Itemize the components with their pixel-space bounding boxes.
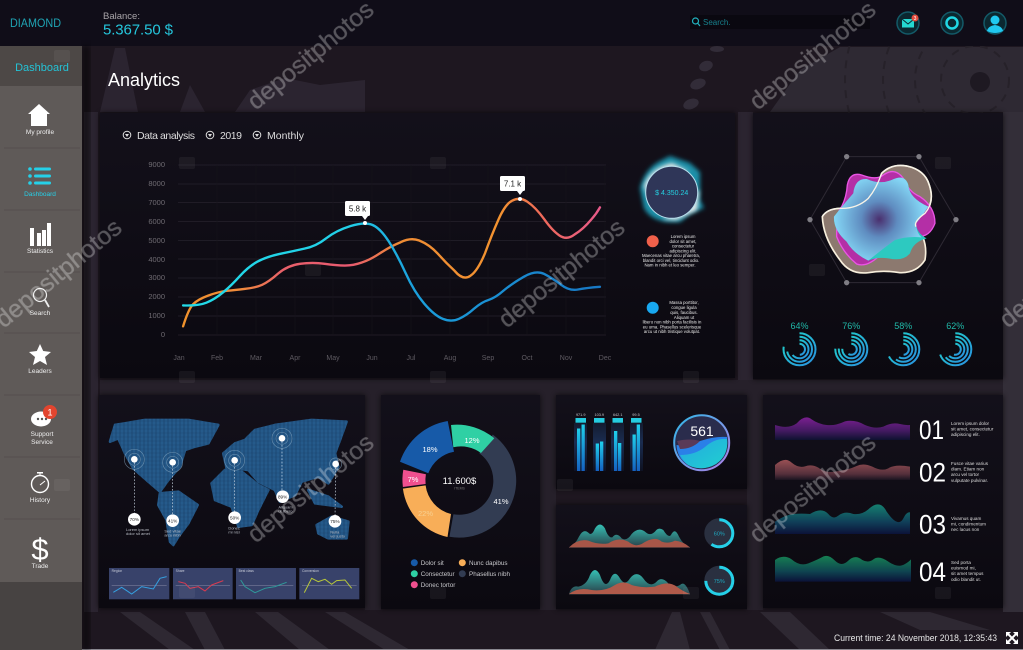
- logo: DIAMOND: [10, 18, 61, 30]
- legend: orange series: [642, 234, 700, 268]
- map pins: [124, 428, 346, 538]
- filter row: [123, 130, 305, 142]
- y axis labels: 8000: [148, 179, 165, 188]
- wave row 02: [775, 458, 989, 488]
- legend: orange series: blandit orci vel, tincidunt odio.: [643, 258, 699, 263]
- header bar: [0, 0, 1023, 46]
- filter row: 2019: [220, 130, 242, 142]
- dashboard tab: [0, 46, 82, 86]
- panel: donut chart: 12%: [464, 436, 480, 445]
- wave row 04: sit amet tempus: [951, 571, 984, 576]
- y axis labels: 3000: [148, 273, 165, 282]
- gauge 75%: [706, 567, 733, 594]
- donut legend: Donec tortor: [421, 582, 455, 589]
- tooltip 7.1 k: [500, 176, 525, 201]
- legend: orange series: consectetur: [672, 244, 695, 248]
- area chart bottom: [569, 570, 690, 594]
- bar columns: 99.5: [632, 413, 640, 417]
- map pins: Aliquam: [278, 504, 293, 509]
- search box: [690, 15, 870, 29]
- gauge 561: 561: [690, 423, 714, 439]
- wave row 04: Sed porta: [951, 560, 971, 565]
- nav: statistics: [27, 223, 54, 255]
- panel: donut chart: [381, 395, 540, 609]
- icon: mail: 3: [914, 16, 917, 22]
- map pins: 70%: [130, 517, 139, 522]
- x axis labels: Feb: [211, 355, 223, 362]
- balance circle: $ 4.350.24: [655, 190, 688, 197]
- nav: history: [30, 472, 51, 504]
- wave row 03: 03: [919, 510, 946, 540]
- x axis labels: Apr: [290, 355, 301, 362]
- y axis labels: 1000: [148, 311, 165, 320]
- icon: mail: [897, 12, 919, 34]
- texture bottom: [120, 612, 990, 650]
- nav: support service: Service: [31, 439, 53, 446]
- footer clock: Current time: 24 November 2018, 12:35:43: [834, 633, 997, 643]
- map pins: 41%: [168, 518, 177, 523]
- tooltip 5.8 k: 5.8 k: [349, 204, 367, 214]
- wave row 02: vulputate pulvinar.: [951, 478, 988, 483]
- legend: blue series: eu urna. Phasellus scelerisque: [643, 324, 702, 330]
- panel: donut chart: 7%: [408, 475, 419, 484]
- panel: bars and gauge: [556, 395, 747, 489]
- wave row 02: Fusce vitae varius: [951, 461, 989, 466]
- wave row 04: 04: [919, 557, 946, 587]
- map pins: Lorem ipsum: [126, 527, 150, 532]
- balance: [103, 11, 174, 38]
- legend: blue series: quis, faucibus.: [670, 310, 698, 315]
- y axis labels: 5000: [148, 236, 165, 245]
- watermarks: depositphotos: [744, 428, 881, 549]
- watermarks: depositphotos: [242, 428, 379, 549]
- nav: history: History: [30, 497, 51, 504]
- y axis labels: 6000: [148, 217, 165, 226]
- nav: trade: Trade: [32, 563, 49, 570]
- ring gauge 64%: 64%: [790, 321, 809, 331]
- donut centre value: 11.600$: [443, 476, 477, 487]
- legend: orange series: Maecenas vitae arcu pharetra,: [642, 253, 700, 258]
- x axis labels: Jan: [173, 355, 185, 362]
- y axis labels: [148, 160, 165, 339]
- panel: wave list: [763, 395, 1003, 608]
- x axis labels: Jun: [366, 355, 378, 362]
- gauge 60%: 60%: [714, 532, 725, 538]
- donut legend: [411, 559, 510, 589]
- tooltip 5.8 k: [345, 201, 370, 225]
- nav: support service: 1: [47, 408, 53, 418]
- legend: blue series: congue ligula: [671, 305, 697, 310]
- nav: statistics: Statistics: [27, 248, 54, 255]
- panel: radar chart: [753, 113, 1003, 379]
- panel: donut chart: 18%: [422, 445, 438, 454]
- tooltip 7.1 k: 7.1 k: [504, 180, 522, 188]
- ring gauge 76%: 76%: [842, 321, 860, 331]
- y axis labels: 9000: [148, 160, 165, 169]
- nav: my profile: My profile: [26, 129, 54, 136]
- filter row: Data analysis: [137, 130, 195, 142]
- gauge 75%: 75%: [714, 579, 725, 585]
- x axis labels: Nov: [560, 355, 573, 362]
- mini chart: share: [173, 568, 233, 599]
- donut legend: Nunc dapibus: [469, 560, 508, 567]
- ring gauge 58%: 58%: [894, 321, 912, 331]
- filter row: Monthly: [267, 130, 305, 142]
- nav: my profile: [26, 104, 54, 136]
- x axis labels: Dec: [599, 355, 612, 362]
- map pins: Nulla: [330, 529, 340, 534]
- ring gauge 62%: 62%: [946, 321, 964, 331]
- wave row 03: Vivamus quam: [951, 516, 981, 521]
- gauge 60%: [706, 520, 733, 547]
- map pins: dolor sit amet: [126, 531, 151, 536]
- panel: donut chart: 41%: [493, 497, 509, 506]
- watermarks: depositphotos: [493, 213, 630, 334]
- legend: orange series: Nam in nibh et leo semper.: [644, 262, 696, 268]
- y axis labels: 7000: [148, 198, 165, 207]
- wave row 01: 01: [919, 415, 944, 445]
- panel: world map: [99, 395, 365, 608]
- x axis labels: Aug: [444, 355, 456, 362]
- wave row 03: nec lacus non: [951, 527, 980, 532]
- y axis labels: 4000: [148, 255, 165, 264]
- panel: donut chart: 22%: [418, 509, 433, 518]
- balance circle: [640, 156, 704, 222]
- panel: area charts: [556, 505, 747, 609]
- search box: Search.: [703, 18, 731, 27]
- wave row 01: [775, 415, 994, 445]
- wave row 01: adipiscing elit.: [951, 432, 980, 437]
- donut centre value: ITEMS: [454, 486, 466, 490]
- dashboard tab: Dashboard: [15, 62, 69, 74]
- icon: user: [984, 12, 1006, 34]
- legend: blue series: libero non nibh porta facilisis in: [643, 320, 702, 324]
- nav: trade: $: [31, 532, 49, 567]
- map pins: 75%: [330, 519, 340, 524]
- dotted map: [110, 420, 348, 545]
- balance: 5.367.50 $: [103, 22, 174, 38]
- wave row 04: odio blandit ut.: [951, 577, 981, 582]
- icon: fullscreen: [1006, 632, 1018, 644]
- map pins: ut libero: [278, 508, 293, 513]
- title: Analytics: [108, 70, 180, 90]
- nav: search: [30, 288, 51, 317]
- map pins: 50%: [230, 515, 239, 520]
- area chart top: [569, 524, 690, 547]
- mini chart: region: Region: [112, 569, 122, 573]
- x axis labels: Mar: [250, 355, 263, 362]
- texture top right: [770, 47, 1023, 112]
- wave row 01: sit amet, consectetur: [951, 426, 994, 432]
- nav: leaders: Leaders: [28, 368, 52, 375]
- donut slices: [400, 421, 516, 538]
- map pins: vel justo: [330, 533, 346, 538]
- balance: Balance:: [103, 11, 140, 22]
- mini chart: share: Share: [176, 569, 185, 573]
- wave row 02: diam. Etiam non: [951, 466, 985, 472]
- legend: orange series: adipiscing elit.: [670, 248, 696, 254]
- map pins: mi nisi: [228, 530, 240, 535]
- bar columns: 971.9: [576, 413, 585, 417]
- map pins: 89%: [278, 494, 287, 499]
- gauge 561: [674, 415, 729, 470]
- donut legend: Dolor sit: [421, 560, 444, 567]
- panel: main line chart: [100, 113, 735, 378]
- map pins: Sed vitae: [164, 528, 182, 533]
- map pins: Donec: [228, 526, 240, 531]
- donut legend: Consectetur: [421, 571, 455, 578]
- y axis labels: 2000: [148, 292, 165, 301]
- ring gauge 64%: [784, 321, 816, 365]
- wave row 04: [775, 556, 984, 587]
- nav: support service: Support: [31, 431, 54, 438]
- ring gauge 62%: [939, 321, 971, 365]
- legend: orange series: Lorem ipsum: [671, 234, 696, 239]
- x axis labels: Jul: [407, 355, 416, 362]
- wave row 04: euismod mi,: [951, 566, 976, 570]
- donut legend: Phasellus nibh: [469, 571, 510, 578]
- icon: settings: [941, 12, 963, 34]
- sidebar: [0, 46, 90, 650]
- y axis labels: 0: [161, 330, 165, 339]
- wave row 02: arcu vel tortor: [951, 472, 980, 477]
- camera watermarks: [54, 50, 951, 599]
- legend: orange series: dolor sit amet,: [670, 239, 696, 244]
- ring gauge 58%: [887, 321, 919, 365]
- wave row 02: 02: [919, 458, 946, 488]
- x axis labels: Sep: [482, 355, 494, 362]
- mini chart: conversion: [299, 568, 359, 599]
- mini chart: conversion: Conversion: [302, 569, 319, 573]
- x axis labels: [173, 355, 612, 362]
- bar columns: 642.1: [613, 413, 622, 417]
- legend: blue series: [643, 300, 702, 334]
- bar columns: 103.9: [595, 413, 604, 417]
- line series: [183, 199, 600, 326]
- legend: blue series: arcu ut nibh tristique volutpat.: [644, 329, 700, 334]
- mini chart: best class: Best class: [239, 569, 254, 573]
- nav: support service: [31, 405, 57, 446]
- radar blobs: [807, 154, 959, 285]
- nav: dashboard: Dashboard: [24, 191, 56, 198]
- mini chart: region: [109, 568, 169, 599]
- nav: dashboard: [24, 167, 56, 198]
- wave row 03: mi, condimentum: [951, 522, 986, 526]
- ring gauge 76%: [835, 321, 867, 365]
- nav: search: Search: [30, 310, 51, 317]
- x axis labels: Oct: [522, 355, 532, 362]
- nav: leaders: [28, 344, 52, 375]
- bar columns: [574, 413, 643, 471]
- mini chart: best class: [236, 568, 296, 599]
- legend: blue series: Aliquam ut: [674, 315, 695, 320]
- wave row 01: Lorem ipsum dolor: [951, 421, 990, 426]
- legend: blue series: Massa porttitor,: [669, 300, 699, 305]
- map pins: arcu nibh: [164, 532, 181, 537]
- x axis labels: May: [326, 355, 340, 362]
- wave row 03: [775, 504, 986, 540]
